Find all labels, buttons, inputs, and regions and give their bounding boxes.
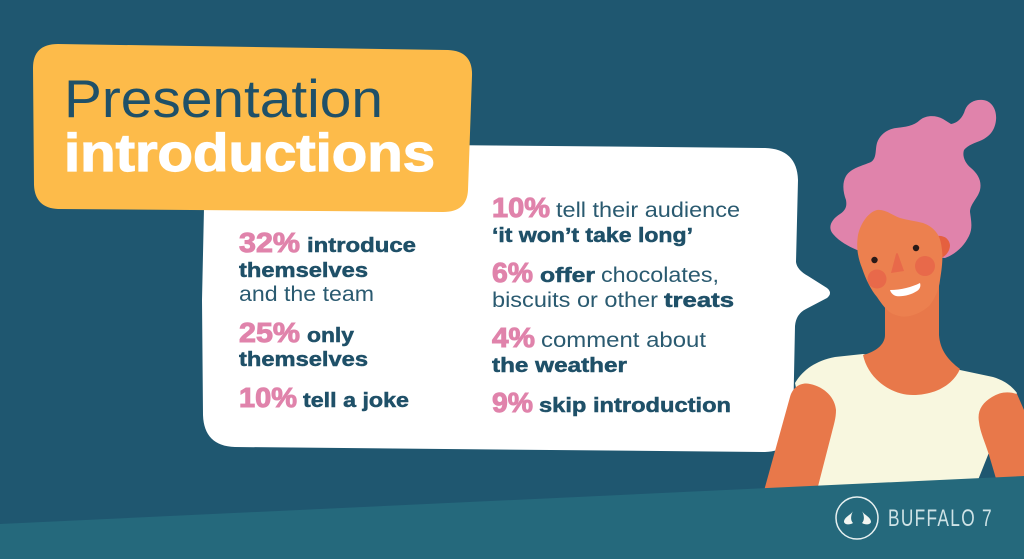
stat: 4%: [492, 322, 706, 377]
smile: [890, 283, 920, 296]
right arm: [979, 392, 1024, 482]
left eye: [871, 257, 878, 263]
stat: 32%: [239, 227, 416, 306]
stat: 9%: [492, 387, 731, 418]
speech bubble: [202, 143, 830, 452]
stat: 4%: 4%: [492, 322, 535, 353]
stat: 6%: offer: [540, 265, 595, 287]
stat: 32%: 32%: [239, 227, 300, 258]
stat: 4%: comment about: [541, 329, 706, 352]
stat: 25%: only: [307, 325, 355, 347]
right statistics column: [492, 192, 740, 418]
stat: 25%: themselves: [239, 349, 368, 371]
right eye: [913, 245, 919, 251]
title line 2: introductions: [64, 124, 435, 183]
left cheek: [868, 270, 886, 288]
stat: 25%: 25%: [239, 317, 300, 348]
bottom band: [0, 476, 1024, 559]
stat: 10% audience: [492, 192, 740, 247]
shirt: [795, 354, 1017, 492]
stat: 6%: treats: [664, 290, 734, 312]
stat: 9%: 9%: [492, 387, 533, 418]
logo wordmark: BUFFALO 7: [888, 505, 992, 532]
neck and chest: [863, 285, 960, 395]
stat: 4%: the weather: [492, 355, 627, 377]
left statistics column: [239, 227, 416, 413]
stat: 6%: [492, 257, 734, 312]
right cheek: [915, 256, 935, 276]
title line 1: Presentation: [64, 70, 383, 129]
face: [857, 210, 942, 317]
logo: [836, 497, 992, 539]
ear: [937, 236, 950, 258]
logo horns: [844, 511, 871, 524]
stat: 6%: 6%: [492, 257, 533, 288]
stat: 32%: themselves: [239, 260, 368, 282]
stat: 32%: and the team: [239, 283, 374, 306]
nose: [891, 253, 904, 273]
woman illustration: [762, 100, 1024, 498]
stat: 6%: chocolates,: [601, 264, 719, 287]
stat: 10% audience: tell their audience: [556, 199, 740, 222]
stat: 10% audience: ‘it won’t take long’: [492, 225, 693, 247]
hair: [830, 100, 996, 258]
stat: 6%: biscuits or other: [492, 289, 658, 312]
stat: 10% joke: 10%: [239, 382, 297, 413]
title banner: [33, 44, 472, 212]
stat: 10% joke: [239, 382, 409, 413]
stat: 10% joke: tell a joke: [303, 390, 409, 412]
logo circle: [836, 497, 878, 539]
left arm: [762, 384, 836, 498]
banner background: [33, 44, 472, 212]
stat: 25%: [239, 317, 368, 371]
stat: 10% audience: 10%: [492, 192, 550, 223]
stat: 9%: skip introduction: [539, 395, 731, 417]
stat: 32%: introduce: [307, 235, 416, 257]
